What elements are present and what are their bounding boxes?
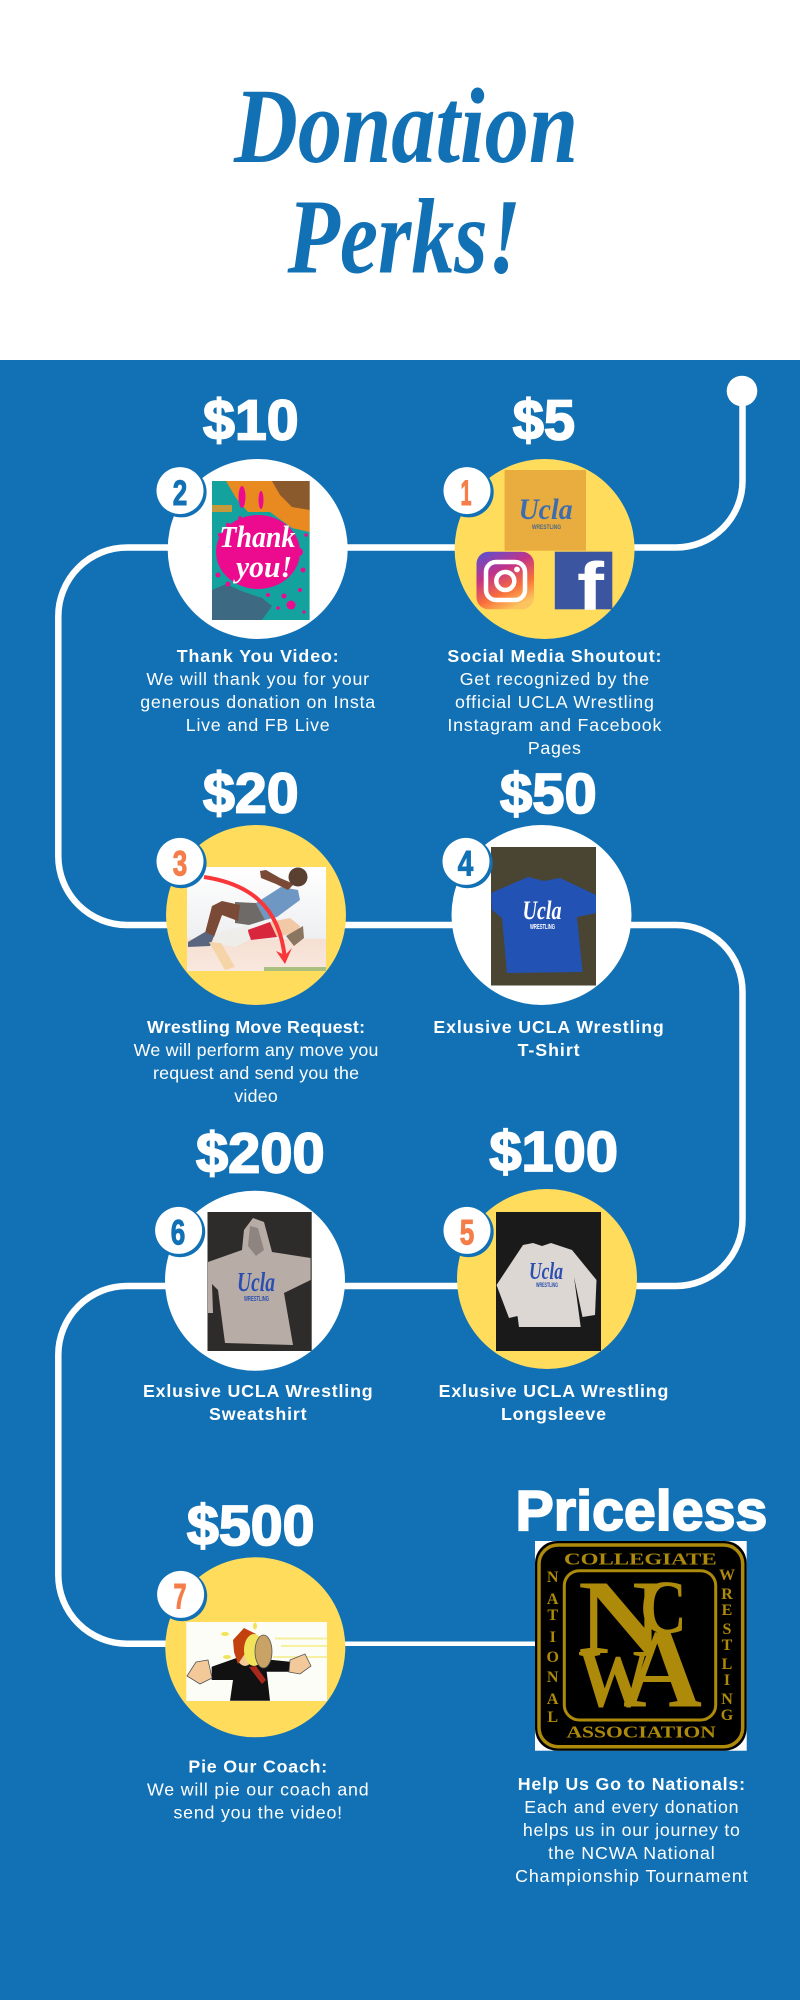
perk 4: t-shirt	[452, 825, 632, 1005]
badge 7	[157, 1571, 207, 1621]
text: social media shoutout: Get recognized by the	[460, 669, 649, 689]
badge 4: 4	[458, 844, 474, 884]
circle	[165, 1557, 345, 1737]
timeline path	[58, 391, 743, 1644]
logo: NCWA: L	[547, 1709, 558, 1726]
title	[233, 68, 578, 297]
text: thank you video	[140, 646, 375, 735]
logo: NCWA: L	[722, 1656, 732, 1673]
logo: NCWA: O	[546, 1649, 559, 1666]
badge 1: 1	[460, 474, 472, 513]
logo: NCWA: N	[721, 1691, 733, 1708]
icon: facebook: f	[577, 548, 604, 624]
badge 5: 5	[460, 1214, 474, 1252]
text: social media shoutout: Instagram and Facebook	[447, 715, 662, 735]
logo: NCWA: W	[578, 1633, 650, 1725]
image: white longsleeve	[496, 1212, 601, 1351]
text: sweatshirt: Exlusive UCLA Wrestling	[143, 1381, 373, 1401]
text: help us go to nationals	[515, 1774, 748, 1886]
logo: NCWA: T	[547, 1607, 558, 1624]
text: t-shirt: Exlusive UCLA Wrestling	[433, 1017, 664, 1037]
logo: NCWA	[535, 1541, 747, 1751]
text: social media shoutout: Pages	[528, 738, 581, 758]
badge 2: 2	[173, 474, 187, 513]
text: pie our coach: send you the video!	[174, 1803, 342, 1823]
badge 7: 7	[174, 1578, 186, 1616]
logo: NCWA: W	[719, 1567, 735, 1584]
badge 1	[443, 467, 494, 517]
image: UCLA wrestling logo	[505, 470, 586, 551]
image: blue t-shirt	[491, 847, 596, 986]
perk 3: wrestling move request	[166, 825, 346, 1005]
text: thank you video: We will thank you for your	[146, 669, 369, 689]
text: help us go to nationals: Championship Tournament	[515, 1866, 748, 1886]
amount: $100: $100	[489, 1120, 618, 1184]
circle	[166, 825, 346, 1005]
circle	[457, 1189, 637, 1369]
image: grey hoodie: Ucla	[237, 1267, 275, 1297]
perk 6: sweatshirt	[165, 1191, 345, 1371]
badge 6	[155, 1207, 205, 1257]
circle	[165, 1191, 345, 1371]
text: wrestling move request: Wrestling Move Request:	[147, 1017, 365, 1037]
text: sweatshirt	[143, 1381, 373, 1424]
text: wrestling move request: video	[234, 1086, 278, 1106]
perk 5: longsleeve	[457, 1189, 637, 1369]
text: thank you video: Live and FB Live	[186, 715, 330, 735]
text: help us go to nationals: Help Us Go to Nationals:	[518, 1774, 745, 1794]
perk 2: thank you video	[168, 459, 348, 639]
title: Donation	[233, 68, 578, 186]
text: help us go to nationals: helps us in our journey to	[523, 1820, 740, 1840]
perk 7: pie our coach	[165, 1557, 345, 1737]
logo: NCWA: A	[547, 1691, 559, 1708]
text: t-shirt	[433, 1017, 664, 1060]
text: wrestling move request: We will perform any move you	[134, 1040, 378, 1060]
perk 1: social media shoutout	[455, 459, 635, 639]
logo: NCWA: T	[722, 1637, 733, 1654]
background: white header	[0, 0, 800, 360]
logo: NCWA: N	[547, 1569, 559, 1586]
logo: NCWA: S	[723, 1621, 732, 1638]
title: Perks!	[287, 179, 521, 297]
image: thank you card: you!	[232, 549, 292, 584]
badge 4	[442, 838, 493, 888]
amount: $10: $10	[203, 388, 299, 452]
image: thank you card	[212, 481, 310, 620]
logo: NCWA: I	[724, 1672, 730, 1689]
timeline start dot	[727, 376, 757, 406]
circle	[168, 459, 348, 639]
logo: NCWA: I	[550, 1629, 556, 1646]
badge 6: 6	[171, 1214, 185, 1252]
image: coach hit by pie	[186, 1622, 327, 1701]
icon: facebook	[555, 548, 612, 624]
text: wrestling move request: request and send you the	[153, 1063, 359, 1083]
logo: NCWA: COLLEGIATE	[564, 1549, 717, 1568]
image: UCLA wrestling logo: WRESTLING	[532, 525, 561, 531]
text: pie our coach: We will pie our coach and	[147, 1780, 369, 1800]
text: help us go to nationals: Each and every donation	[524, 1797, 739, 1817]
logo: NCWA: N	[578, 1559, 663, 1676]
text: help us go to nationals: the NCWA National	[548, 1843, 715, 1863]
text: social media shoutout: Social Media Shoutout:	[447, 646, 661, 666]
badge 3: 3	[173, 844, 187, 884]
text: thank you video: Thank You Video:	[177, 646, 339, 666]
badge 3	[156, 838, 207, 888]
circle	[455, 459, 635, 639]
image: white longsleeve: Ucla	[529, 1259, 563, 1285]
icon: instagram	[476, 552, 534, 609]
logo: NCWA: R	[721, 1586, 733, 1603]
image: blue t-shirt: Ucla	[522, 896, 562, 925]
amount: $200: $200	[196, 1122, 325, 1186]
text: longsleeve: Exlusive UCLA Wrestling	[439, 1381, 668, 1401]
logo: NCWA: ASSOCIATION	[566, 1722, 717, 1741]
image: thank you card: Thank	[219, 519, 296, 554]
image: UCLA wrestling logo: Ucla	[519, 493, 573, 526]
text: pie our coach	[147, 1757, 369, 1823]
image: blue t-shirt: WRESTLING	[530, 924, 555, 931]
text: longsleeve: Longsleeve	[501, 1404, 606, 1424]
image: grey hoodie	[208, 1212, 312, 1351]
logo: NCWA: E	[722, 1602, 732, 1619]
badge 2	[156, 467, 207, 517]
image: wrestlers	[187, 867, 326, 971]
badge 5	[443, 1207, 494, 1257]
amount: $500: $500	[187, 1494, 315, 1558]
text: social media shoutout	[447, 646, 662, 758]
logo: NCWA: C	[640, 1566, 687, 1650]
logo: NCWA: N	[547, 1669, 559, 1686]
logo: NCWA: A	[547, 1591, 559, 1608]
text: social media shoutout: official UCLA Wrestling	[455, 692, 654, 712]
logo: NCWA: A	[623, 1608, 702, 1732]
amount: Priceless: Priceless	[516, 1479, 767, 1543]
amount: $20: $20	[203, 762, 299, 826]
text: thank you video: generous donation on Insta	[140, 692, 375, 712]
amount: $50: $50	[500, 762, 597, 826]
text: wrestling move request	[134, 1017, 378, 1106]
text: longsleeve	[439, 1381, 668, 1424]
image: grey hoodie: WRESTLING	[244, 1296, 269, 1303]
circle	[452, 825, 632, 1005]
image: white longsleeve: WRESTLING	[536, 1283, 558, 1289]
text: sweatshirt: Sweatshirt	[209, 1404, 307, 1424]
text: pie our coach: Pie Our Coach:	[188, 1757, 327, 1777]
logo: NCWA: G	[721, 1707, 734, 1724]
amount: $5: $5	[513, 388, 575, 452]
text: t-shirt: T-Shirt	[518, 1040, 580, 1060]
